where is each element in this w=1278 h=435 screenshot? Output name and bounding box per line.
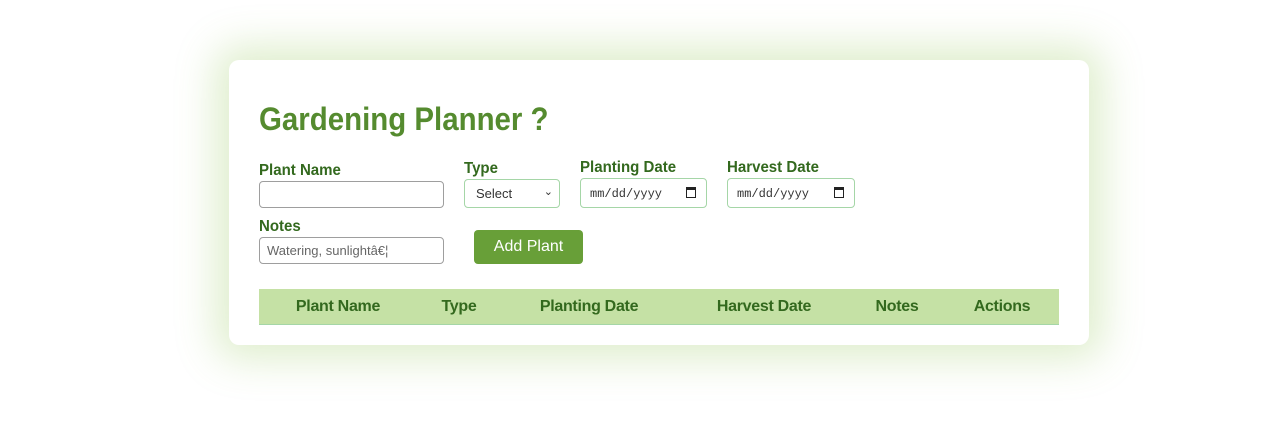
select: type (464, 179, 560, 208)
label: harvest date: Harvest Date (727, 159, 819, 176)
label: plant name: Plant Name (259, 162, 341, 179)
header: type: Type (442, 298, 476, 315)
header: notes: Notes (876, 298, 918, 315)
button: add plant (474, 230, 583, 264)
input: planting date: mm/dd/yyyy (590, 187, 662, 201)
label: planting date: Planting Date (580, 159, 676, 176)
title: Gardening Planner ? (259, 101, 549, 137)
header: actions: Actions (974, 298, 1030, 315)
button: add plant: Add Plant (494, 238, 563, 255)
select: type: ⌄ (544, 186, 553, 198)
input: planting date (580, 178, 707, 208)
input: notes: Watering, sunlightâ€¦ (267, 243, 388, 258)
table header (259, 289, 1059, 325)
header: plant name: Plant Name (296, 298, 380, 315)
panel: planner card (229, 60, 1089, 345)
header: harvest date: Harvest Date (717, 298, 811, 315)
input: notes (259, 237, 444, 264)
input: harvest date (727, 178, 855, 208)
label: notes: Notes (259, 218, 301, 235)
input: harvest date: mm/dd/yyyy (737, 187, 809, 201)
label: type: Type (464, 160, 498, 177)
input: plant name (259, 181, 444, 208)
header: planting date: Planting Date (540, 298, 638, 315)
select: type: Select (476, 186, 512, 201)
